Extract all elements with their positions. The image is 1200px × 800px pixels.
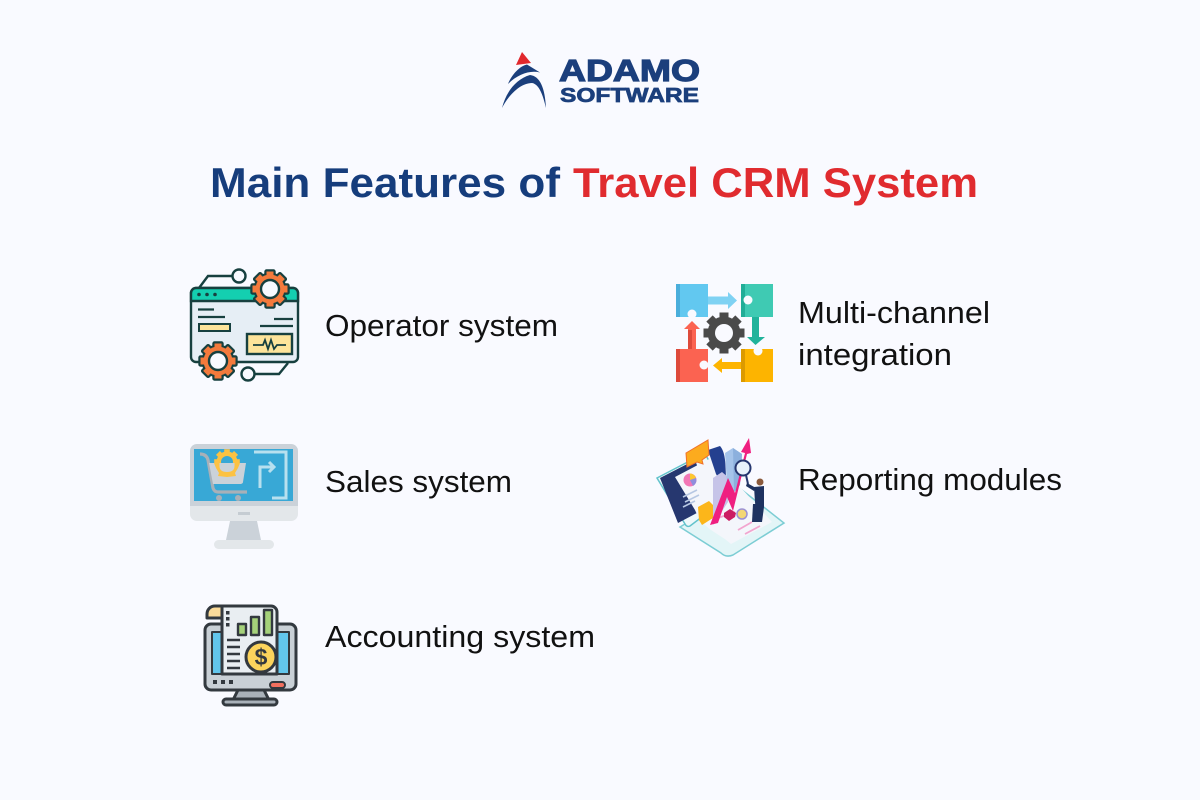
logo wordmark: SOFTWARE <box>560 85 699 107</box>
label: Multi-channel <box>798 295 990 330</box>
icon: monitor with shopping cart <box>190 444 298 549</box>
logo: Adamo Software <box>502 52 700 108</box>
label <box>798 295 990 372</box>
icon: window with gears <box>191 270 298 380</box>
feature: Operator system <box>191 270 558 380</box>
icon: monitor with report and coin <box>205 606 296 705</box>
label: Operator system <box>325 308 558 343</box>
label: Sales system <box>325 464 512 499</box>
feature: Multi-channel integration <box>676 284 990 382</box>
label: Reporting modules <box>798 462 1062 497</box>
title <box>210 159 978 206</box>
icon: monitor with report and coin: $ <box>255 644 268 670</box>
logo mark <box>502 52 546 108</box>
logo wordmark: ADAMO <box>559 53 700 88</box>
feature: Reporting modules <box>657 438 1062 556</box>
feature: Sales system <box>190 444 512 549</box>
label: Accounting system <box>325 619 595 654</box>
label: integration <box>798 337 952 372</box>
icon: isometric report with analyst <box>657 438 784 556</box>
logo wordmark <box>559 53 700 107</box>
title: Main Features of <box>210 159 561 206</box>
feature: Accounting system <box>205 606 595 705</box>
icon: puzzle pieces around gear <box>676 284 773 382</box>
title: Travel CRM System <box>573 159 978 206</box>
